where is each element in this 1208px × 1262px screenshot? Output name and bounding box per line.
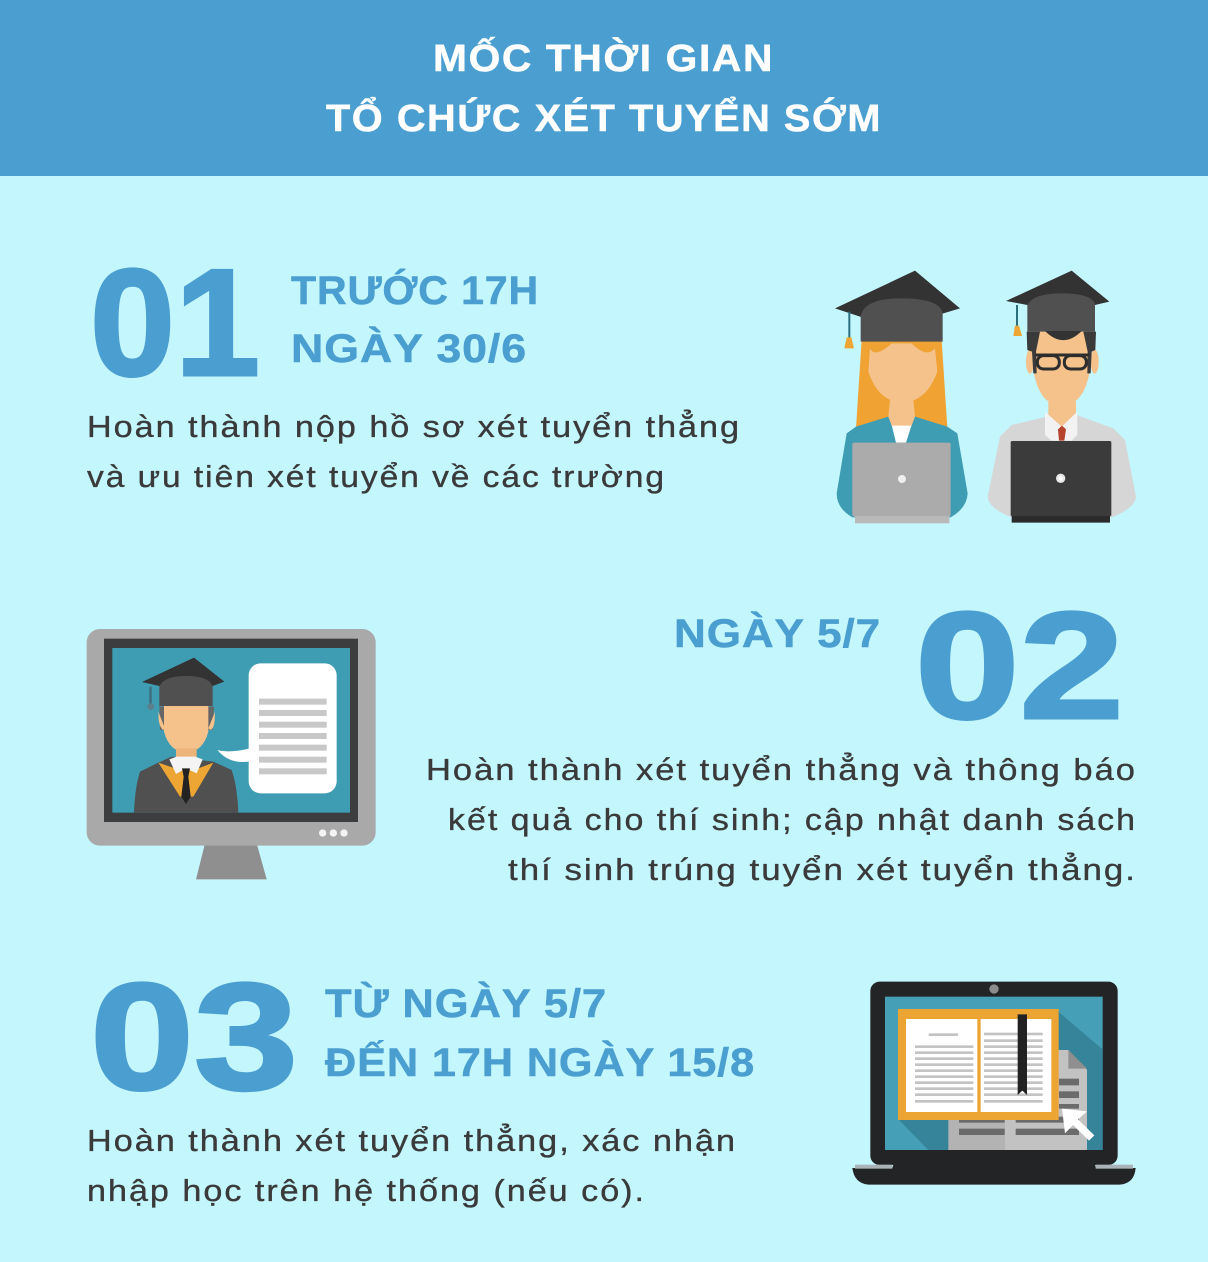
description 01: và ưu tiên xét tuyển về các trường <box>87 459 666 494</box>
date heading 03: ĐẾN 17H NGÀY 15/8 <box>325 1039 755 1085</box>
description 03: nhập học trên hệ thống (nếu có). <box>87 1173 646 1208</box>
description 02 <box>426 751 1137 887</box>
date heading 02: NGÀY 5/7 <box>674 611 881 656</box>
header banner with title <box>0 0 1208 176</box>
title: MỐC THỜI GIAN <box>433 35 774 80</box>
title: TỔ CHỨC XÉT TUYỂN SỚM <box>326 95 882 140</box>
description 02: thí sinh trúng tuyển xét tuyển thẳng. <box>508 851 1137 887</box>
icon: document <box>948 1050 1087 1150</box>
number 02: 02 <box>915 581 1124 751</box>
icon: cursor arrow <box>1062 1109 1094 1141</box>
panel: step 01 <box>87 238 1136 523</box>
panel: step 02 <box>87 581 1137 887</box>
date heading 03 <box>325 980 755 1085</box>
description 01 <box>87 408 741 494</box>
date heading 03: TỪ NGÀY 5/7 <box>325 980 607 1026</box>
icon: graduates with laptops <box>835 271 1136 523</box>
description 03 <box>87 1122 737 1208</box>
description 02: Hoàn thành xét tuyển thẳng và thông báo <box>426 751 1137 787</box>
description 02: kết quả cho thí sinh; cập nhật danh sách <box>448 802 1137 837</box>
icon: male graduate with glasses <box>988 271 1136 523</box>
icon: laptop with book and cursor <box>852 982 1136 1185</box>
icon: lecturer <box>134 658 238 813</box>
icon: open book <box>898 1009 1059 1120</box>
icon: female graduate <box>835 271 968 523</box>
panel: step 03 <box>87 952 1136 1208</box>
title <box>326 35 882 140</box>
description 01: Hoàn thành nộp hồ sơ xét tuyển thẳng <box>87 408 741 444</box>
number 03: 03 <box>90 952 298 1122</box>
icon: monitor with graduate and speech bubble <box>87 629 376 879</box>
icon: speech bubble <box>217 663 337 793</box>
description 03: Hoàn thành xét tuyển thẳng, xác nhận <box>87 1122 737 1158</box>
number 01: 01 <box>90 238 260 408</box>
date heading 01 <box>291 267 539 371</box>
date heading 01: NGÀY 30/6 <box>291 326 527 371</box>
date heading 01: TRƯỚC 17H <box>291 267 539 313</box>
